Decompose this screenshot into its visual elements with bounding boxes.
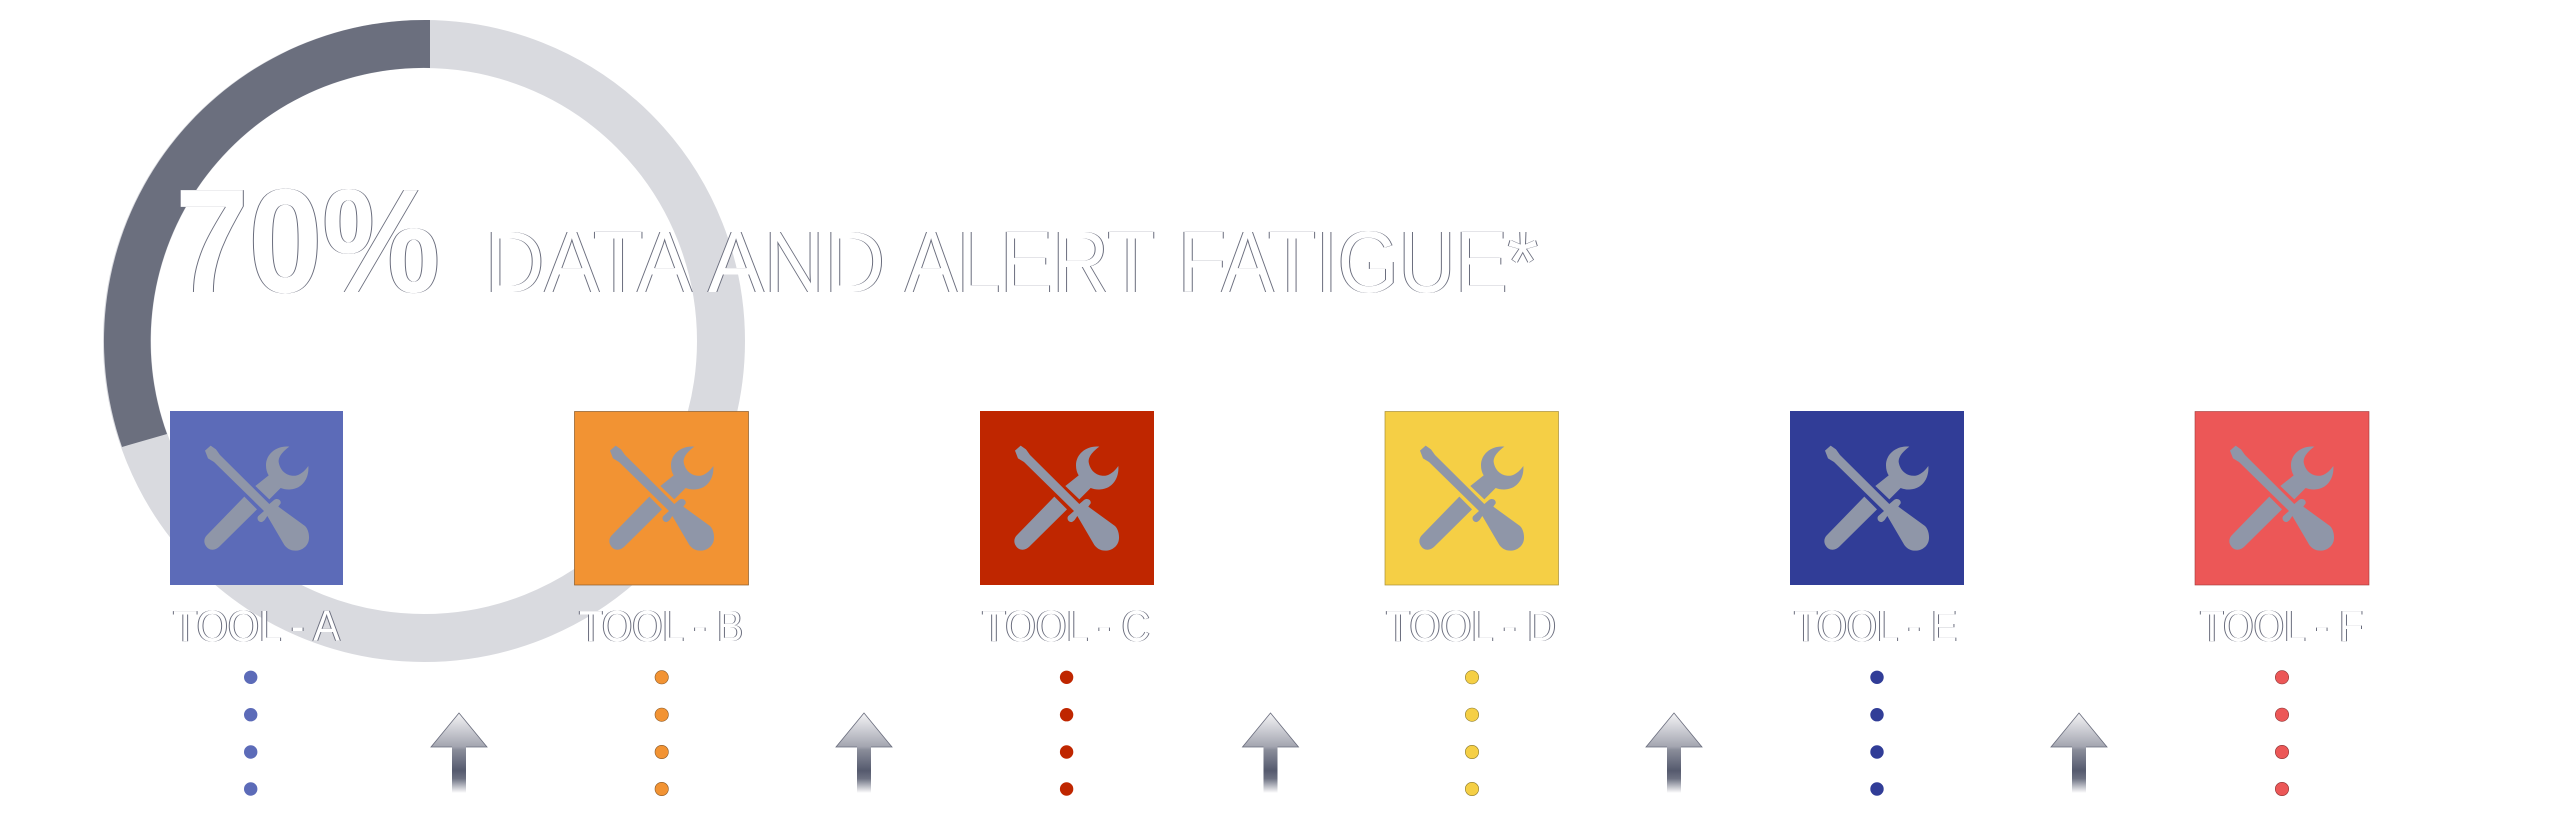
ring track (127, 44, 721, 638)
tool E column (1790, 411, 1964, 796)
tool D icon (1419, 446, 1524, 551)
tool B column (574, 412, 748, 796)
tool C dots (1060, 671, 1073, 796)
tool B dots (655, 671, 668, 796)
headline title: AND (708, 214, 885, 311)
tool D tile (1385, 412, 1558, 585)
tool B tile (574, 412, 748, 585)
tool A dots (244, 671, 257, 796)
headline title: DATA (485, 214, 692, 311)
headline title: ALERT (905, 214, 1155, 311)
tool D label: TOOL - D (1386, 603, 1556, 651)
tool A column (170, 411, 343, 796)
tool F icon (2229, 446, 2334, 551)
tool C tile (980, 411, 1154, 585)
tool F tile (2195, 412, 2369, 585)
tool A tile (170, 411, 343, 585)
tool F column (2195, 412, 2369, 796)
donut chart: 70% (104, 20, 721, 638)
tool E icon (1824, 446, 1929, 551)
arrow C to D (1242, 713, 1298, 793)
arrow A to B (431, 713, 487, 793)
tool F label: TOOL - F (2200, 603, 2363, 651)
tool E label: TOOL - E (1794, 603, 1957, 651)
tool E dots (1870, 671, 1884, 796)
tool C icon (1014, 446, 1119, 551)
tool A icon (204, 446, 309, 551)
headline title: FATIGUE* (1178, 214, 1538, 311)
tool B label: TOOL - B (579, 603, 743, 651)
tool D dots (1465, 671, 1479, 796)
headline percentage: 70% (175, 159, 440, 324)
arrow E to F (2051, 713, 2107, 793)
arrow D to E (1646, 713, 1702, 793)
ring value arc (104, 20, 430, 447)
tool B icon (609, 446, 714, 551)
tool F dots (2275, 671, 2289, 796)
tool C column (980, 411, 1154, 796)
headline title (485, 214, 1538, 311)
tool A label: TOOL - A (173, 603, 340, 651)
tool E tile (1790, 411, 1964, 585)
tool C label: TOOL - C (982, 603, 1150, 651)
tool D column (1385, 412, 1558, 796)
arrow B to C (836, 713, 892, 793)
